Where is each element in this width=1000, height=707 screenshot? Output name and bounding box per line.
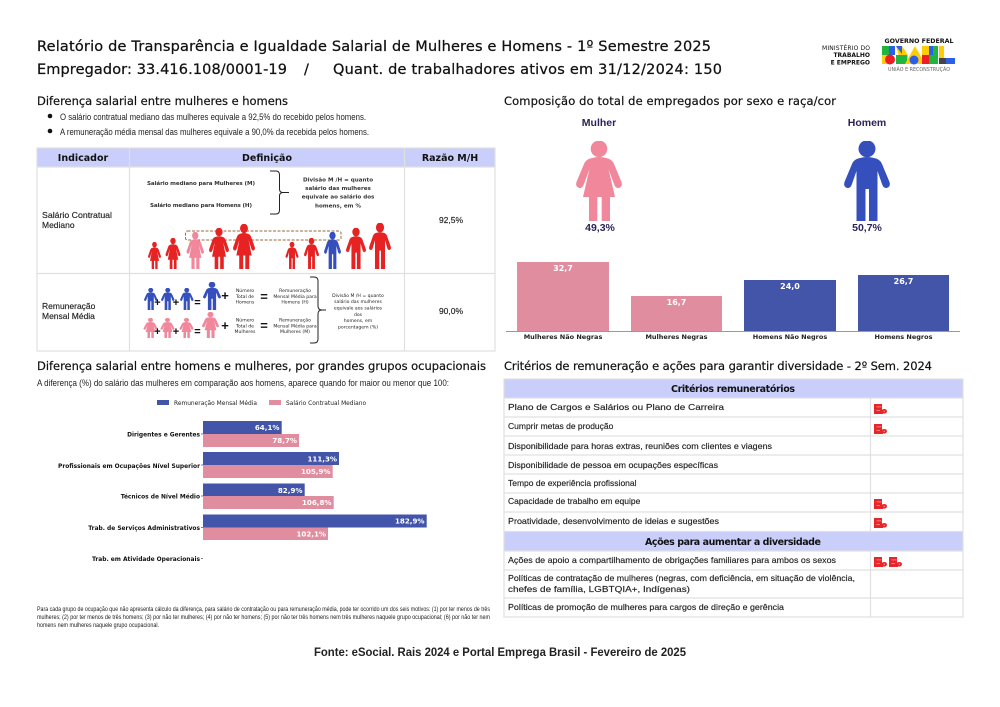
formula operators: = (260, 318, 268, 333)
bar chart: grupos ocupacionais: Dirigentes e Gerentes (127, 432, 200, 438)
bar chart: sexo e raça: 24,0 (780, 282, 800, 291)
criteria rows: Cumprir metas de produção (508, 421, 614, 431)
formula operators (154, 288, 268, 338)
bar chart: sexo e raça: Mulheres Negras (645, 333, 708, 341)
formula text: mulheres: Mensal Média para (273, 322, 317, 330)
action rows: Políticas de promoção de mulheres para cargos de direção e gerência (508, 602, 784, 612)
formula operators: + (221, 318, 229, 333)
title: Quant. de trabalhadores ativos em 31/12/2024: 150 (333, 62, 722, 78)
brace and division text: porcentagem (%) (338, 324, 378, 330)
logo: ministério (822, 44, 870, 66)
brace and division text (310, 277, 384, 343)
value: 92,5%: 92,5% (439, 215, 463, 225)
bar chart: grupos ocupacionais: 106,8% (302, 498, 332, 507)
bar chart: sexo e raça: Homens Negros (875, 333, 933, 341)
logo: governo federal brasil (882, 38, 955, 73)
bar chart: grupos ocupacionais: 102,1% (296, 530, 326, 538)
footnote: mulheres; (2) por ter menos de três homens; (3) por não ter mulheres; (4) por não ter homens; (5) por não ter três homens nem três mulheres naquele grupo ocupacional; (6) por não ter nem (37, 614, 490, 621)
heading: critérios: Critérios de remuneração e ações para garantir diversidade - 2º Sem. 2024 (504, 359, 932, 373)
bullets: A remuneração média mensal das mulheres equivale a 90,0% da recebida pelos homens. (60, 127, 369, 137)
chart legend (157, 400, 367, 407)
brace and division text: salário das mulheres (334, 298, 382, 305)
bar chart: grupos ocupacionais: 78,7% (272, 436, 297, 445)
row label: salário contratual mediano: Mediano (42, 220, 75, 230)
formula text: homens: Remuneração (279, 288, 311, 294)
table header: Definição (242, 153, 292, 164)
formula operators: = (194, 297, 201, 309)
definition text: mediana: equivale ao salário dos (302, 194, 375, 200)
row label: remuneração mensal média: Mensal Média (42, 311, 95, 321)
definition text: mediana: homens, em % (315, 204, 361, 210)
icons: adopted criteria (874, 404, 887, 528)
row label: remuneração mensal média: Remuneração (42, 301, 96, 311)
bar chart: grupos ocupacionais: 182,9% (395, 516, 424, 526)
formula text: mulheres: Mulheres (M) (280, 329, 310, 335)
icons: men by salary (286, 223, 391, 269)
heading: composição: Composição do total de empregados por sexo e raça/cor (504, 94, 836, 108)
panel: indicator table (37, 148, 495, 351)
logo: governo federal brasil: UNIÃO E RECONSTRUÇÃO (888, 66, 950, 73)
title: Relatório de Transparência e Igualdade Salarial de Mulheres e Homens - 1º Semestre 2025 (37, 39, 711, 55)
actions header: Ações para aumentar a diversidade (645, 537, 821, 548)
bar chart: grupos ocupacionais: 82,9% (278, 486, 302, 495)
icons: men sum (144, 282, 221, 310)
title (37, 39, 722, 78)
median highlight box (186, 231, 341, 240)
bar chart: sexo e raça: Mulheres Não Negras (524, 333, 602, 341)
table header: Razão M/H (422, 153, 478, 164)
formula text: mulheres (235, 316, 317, 335)
definition text: mediana: salário das mulheres (305, 185, 372, 192)
table header (37, 148, 495, 167)
chart legend: Salário Contratual Mediano (286, 400, 367, 407)
formula operators: = (194, 326, 201, 338)
brace and division text: equivale aos salários (334, 304, 383, 312)
bar chart: grupos ocupacionais: 64,1% (255, 423, 280, 432)
row label: salário contratual mediano: Salário Contratual (42, 210, 112, 220)
bar chart: sexo e raça: 16,7 (667, 298, 686, 307)
brace and division text: Divisão M /H = quanto (332, 293, 384, 299)
formula operators: + (221, 288, 229, 303)
logo: governo federal brasil: GOVERNO FEDERAL (884, 38, 954, 45)
formula operators: + (154, 326, 161, 338)
logo: ministério: MINISTÉRIO DO (822, 44, 870, 52)
criteria rows: Capacidade de trabalho em equipe (508, 496, 641, 506)
row label: remuneração mensal média (42, 301, 96, 321)
action rows: Políticas de contratação de mulheres (negras, com deficiência, em situação de violência, (508, 573, 855, 583)
criteria rows: Disponibilidade para horas extras, reuniões com clientes e viagens (508, 441, 772, 451)
brace and division text: homens, em (344, 318, 373, 324)
action rows: Ações de apoio a compartilhamento de obrigações familiares para ambos os sexos (508, 555, 836, 565)
action rows: chefes de família, LGBTQIA+, Indígenas) (508, 584, 690, 594)
definition text: mediana: Salário mediano para Homens (H) (150, 202, 252, 209)
footnote: Para cada grupo de ocupação que não apresenta cálculo da diferença, para salário de contratação ou para remuneração média, pode ter ocorrido um dos seis motivos: (1) por ter menos de três (37, 606, 490, 613)
panel: man share (844, 117, 890, 234)
panel: woman share: 49,3% (585, 222, 616, 234)
criteria rows: Plano de Cargos e Salários ou Plano de Carreira (508, 402, 724, 412)
footnote (37, 606, 490, 629)
bar chart: sexo e raça: 26,7 (894, 277, 913, 286)
formula text: mulheres: Remuneração (279, 318, 311, 324)
panel: man share: Homem (848, 117, 886, 129)
heading: grupos ocupacionais: Diferença salarial entre homens e mulheres, por grandes grupos ocupacionais (37, 359, 486, 373)
bullets (48, 112, 369, 137)
bar chart: sexo e raça (506, 262, 960, 341)
bar chart: sexo e raça: Homens Não Negros (753, 333, 827, 341)
definition text: mediana: Salário mediano para Mulheres (M) (147, 180, 255, 187)
heading: diferença salarial: Diferença salarial entre mulheres e homens (37, 94, 288, 108)
value: 90,0%: 90,0% (439, 306, 463, 316)
logo: ministério: TRABALHO (833, 52, 870, 59)
formula text: homens: Mensal Média para (273, 293, 317, 300)
criteria rows: Disponibilidade de pessoa em ocupações específicas (508, 460, 718, 470)
panel: woman share (576, 117, 622, 234)
bar chart: grupos ocupacionais: 111,3% (307, 454, 337, 464)
bar chart: grupos ocupacionais: Trab. em Atividade Operacionais (92, 557, 200, 563)
footnote: homens nem mulheres naquele grupo ocupacional. (37, 622, 159, 629)
formula text: homens (235, 287, 317, 306)
bar chart: grupos ocupacionais (58, 421, 427, 563)
criteria header: Critérios remuneratórios (671, 384, 795, 395)
formula text: homens: Homens (H) (281, 300, 309, 306)
title: / (304, 62, 309, 78)
icons: women by salary (148, 224, 255, 269)
formula operators: + (154, 297, 161, 309)
formula operators: = (260, 289, 268, 304)
formula text: mulheres: Total de (235, 324, 254, 330)
table header: Indicador (58, 153, 109, 164)
title: Empregador: 33.416.108/0001-19 (37, 62, 287, 78)
formula operators: + (173, 326, 179, 338)
formula text: homens: Total de (235, 294, 254, 300)
definition text: mediana: Divisão M /H = quanto (303, 178, 373, 184)
icons: adopted actions (874, 557, 902, 567)
definition text: mediana (147, 171, 375, 214)
criteria rows: Tempo de experiência profissional (508, 478, 637, 488)
bar chart: grupos ocupacionais: Profissionais em Ocupações Nível Superior (58, 463, 200, 470)
row label: salário contratual mediano (42, 210, 112, 230)
panel: woman share: Mulher (582, 117, 616, 129)
chart legend: Remuneração Mensal Média (174, 400, 257, 407)
formula text: mulheres: Mulheres (235, 329, 256, 335)
bar chart: sexo e raça: 32,7 (553, 264, 573, 273)
source: Fonte: eSocial. Rais 2024 e Portal Emprega Brasil - Fevereiro de 2025 (314, 645, 686, 659)
action rows (508, 555, 855, 612)
panel: criteria table (504, 379, 963, 617)
chart intro text: A diferença (%) do salário das mulheres em comparação aos homens, aparece quando for maior ou menor que 100: (37, 378, 449, 388)
bullets: O salário contratual mediano das mulheres equivale a 92,5% do recebido pelos homens. (60, 112, 366, 122)
formula text: mulheres: Número (236, 316, 254, 324)
logo: ministério: E EMPREGO (831, 60, 870, 66)
bar chart: grupos ocupacionais: 105,9% (301, 467, 330, 476)
icons: women sum (144, 312, 219, 338)
brace and division text: dos (354, 312, 363, 318)
formula text: homens: Número (236, 287, 254, 294)
formula operators: + (173, 297, 179, 309)
criteria rows: Proatividade, desenvolvimento de ideias e sugestões (508, 516, 719, 526)
formula text: homens: Homens (236, 300, 255, 306)
panel: man share: 50,7% (852, 222, 883, 234)
bar chart: grupos ocupacionais: Técnicos de Nível Médio (121, 494, 200, 500)
criteria rows (508, 402, 772, 526)
bar chart: grupos ocupacionais: Trab. de Serviços Administrativos (88, 526, 200, 532)
